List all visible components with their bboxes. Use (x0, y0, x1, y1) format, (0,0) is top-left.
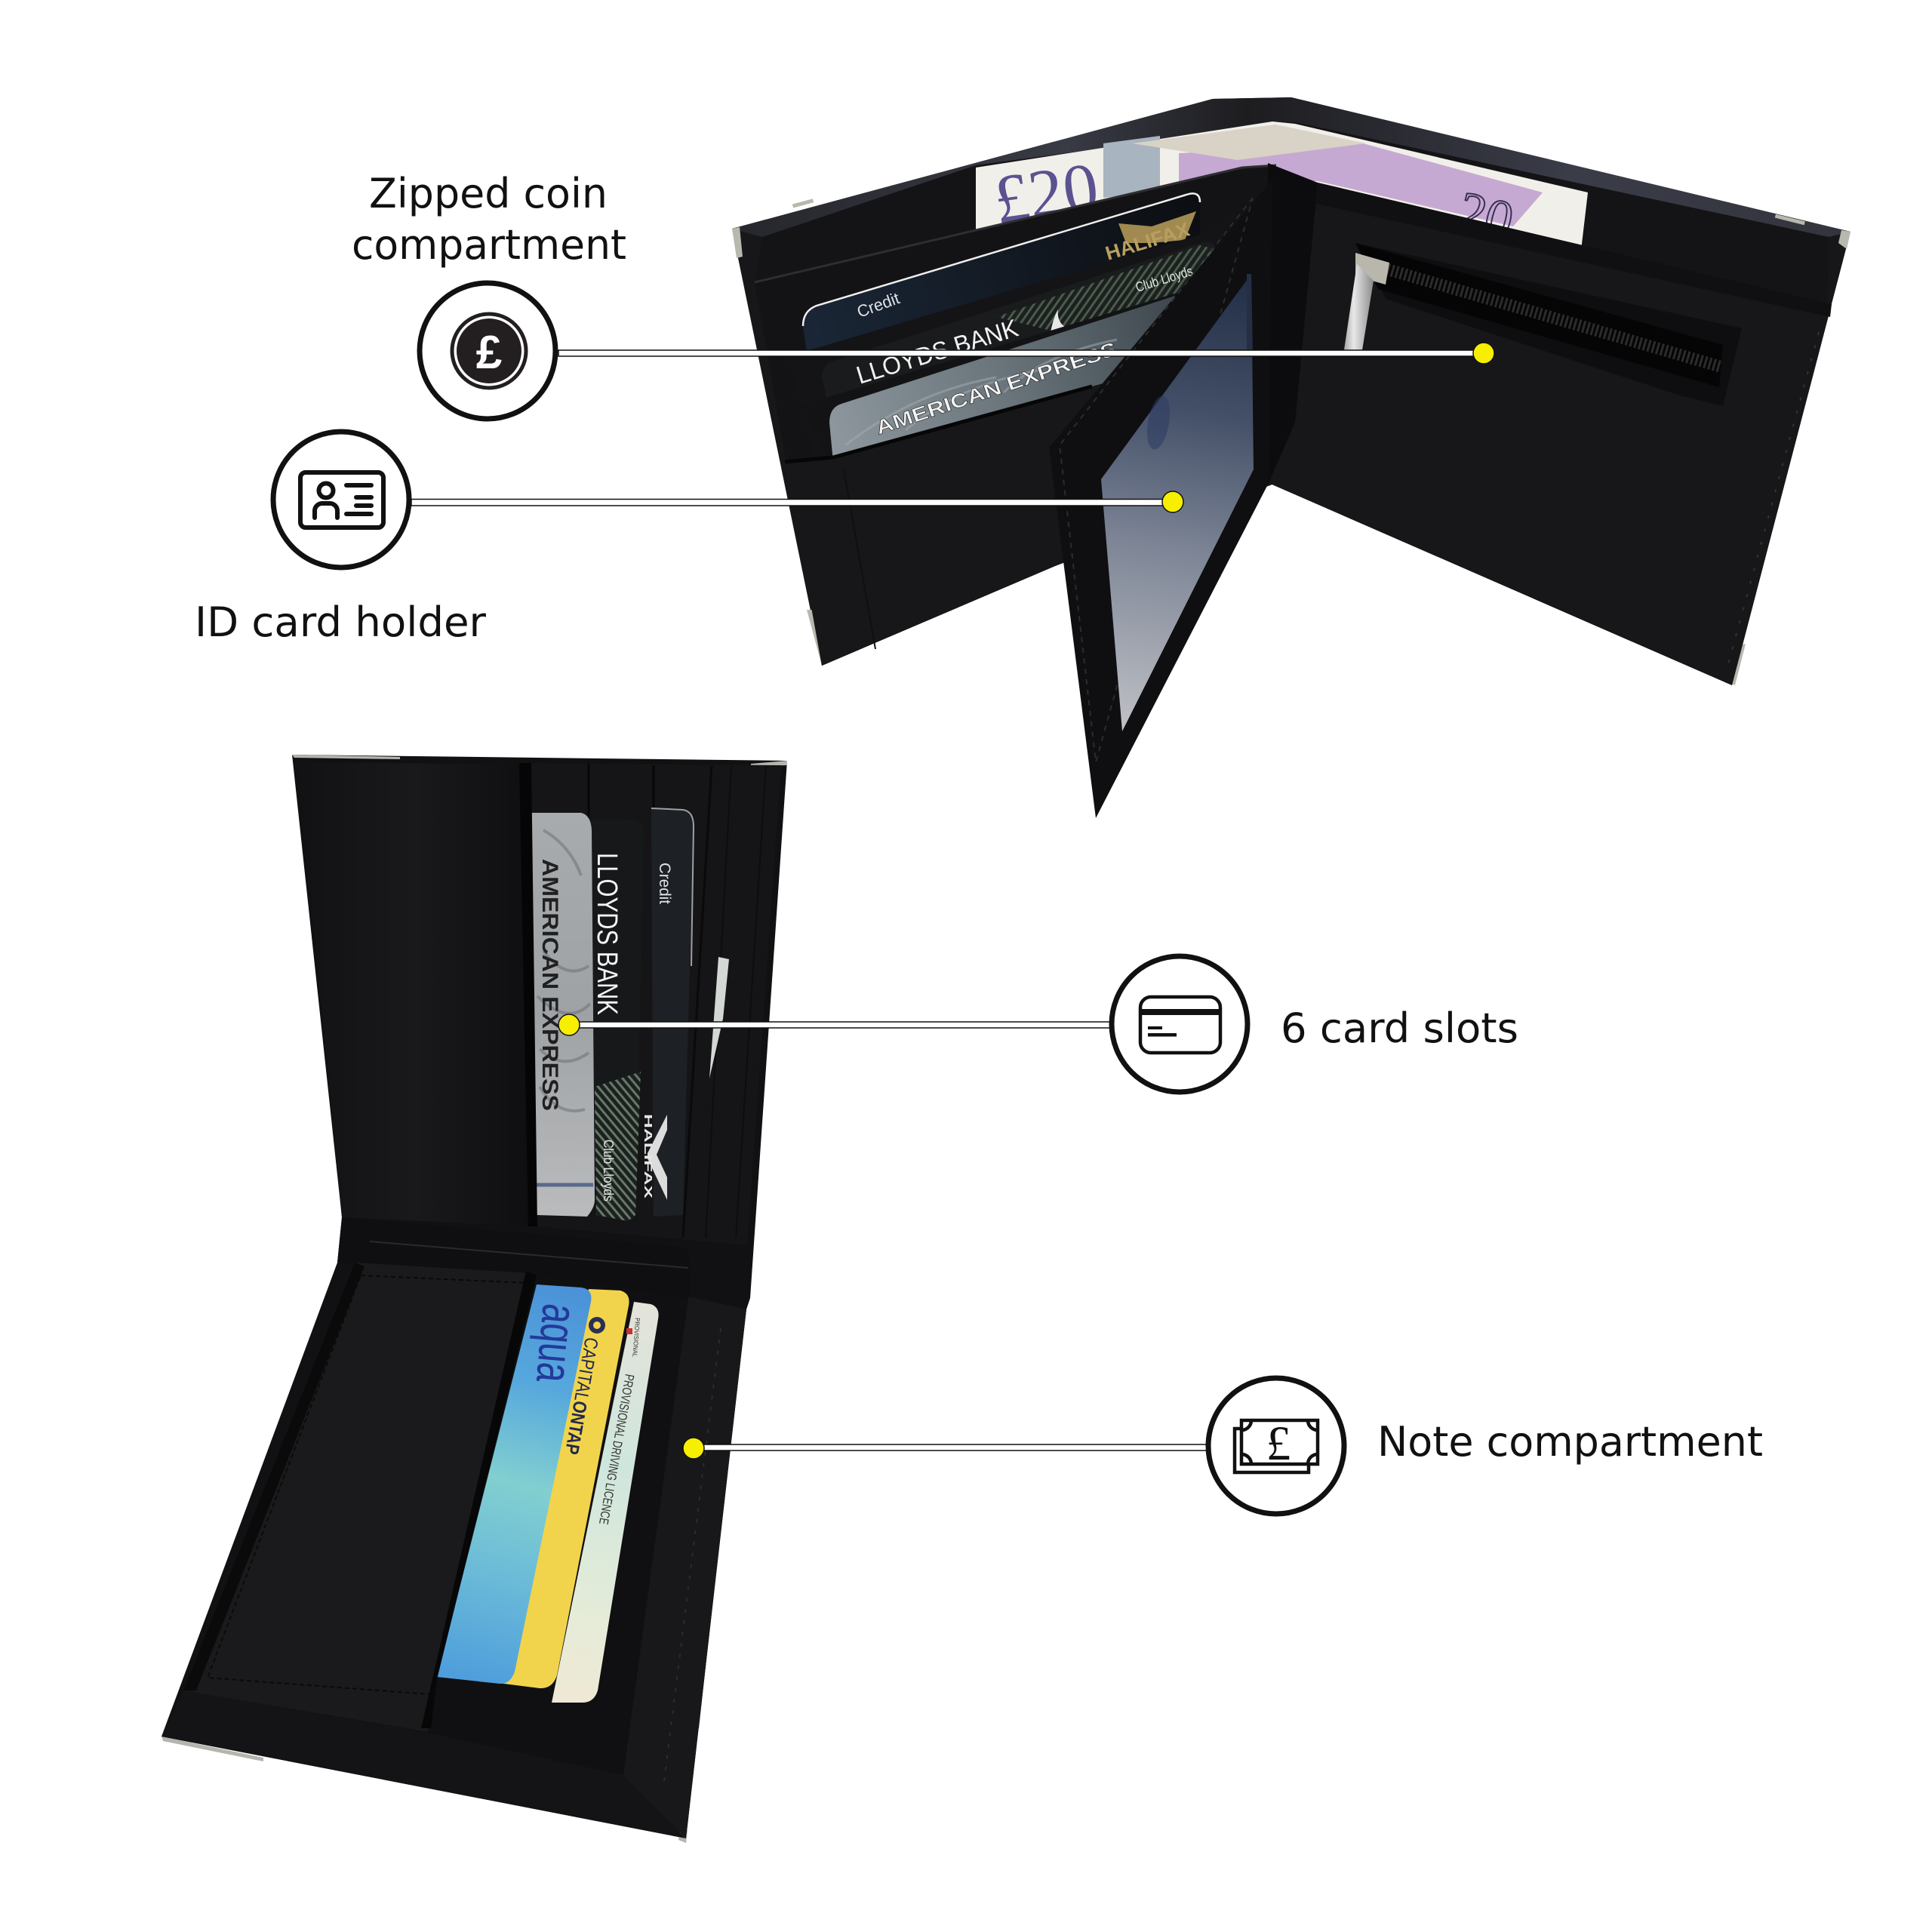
photo: open wallet with ID flap (732, 97, 1850, 818)
slot divider (789, 228, 1238, 528)
card: Aqua: aqua (526, 1302, 589, 1385)
light edge highlights (732, 198, 1850, 685)
label: ID card holder: ID card holder (195, 598, 487, 646)
card: Halifax credit card: Credit (854, 288, 902, 321)
lower left pocket (785, 347, 1276, 666)
callout: zipped coin compartment (352, 170, 1494, 419)
slate outer edge (697, 1419, 731, 1728)
card: driving licence: PROVISIONAL DRIVING LICENCE (596, 1373, 637, 1526)
icon circle (273, 432, 409, 568)
upper right slot panel (521, 763, 781, 1245)
slot divider (800, 279, 1238, 483)
right panel (1269, 183, 1832, 685)
card: Lloyds Bank (822, 242, 1217, 414)
icon: banknotes (1235, 1417, 1318, 1472)
lower band (162, 1690, 686, 1838)
card: Halifax credit: Credit (656, 863, 673, 904)
card: Capital One (498, 1289, 629, 1688)
banknote: 20 (1452, 180, 1519, 251)
card: Aqua (437, 1284, 591, 1684)
note compartment panel (623, 1297, 746, 1838)
icon: pound coin (452, 314, 526, 388)
callout: 6 card slots (558, 956, 1518, 1092)
label: zipped coin compartment: compartment (352, 221, 626, 269)
card: Lloyds Bank (589, 819, 644, 1221)
card: Lloyds Bank: LLOYDS BANK (853, 313, 1021, 389)
pocket edge strip (421, 1271, 537, 1728)
label: note compartment: Note compartment (1377, 1418, 1763, 1466)
card: American Express: AMERICAN EXPRESS (872, 337, 1120, 439)
label: zipped coin compartment (352, 170, 626, 269)
leader line (411, 500, 1173, 506)
banknote edge (709, 957, 729, 1078)
card: American Express: AMERICAN EXPRESS (537, 859, 562, 1111)
zip puller (1355, 253, 1389, 285)
card: Halifax credit card: HALIFAX (1103, 217, 1192, 265)
leader line (569, 1022, 1110, 1028)
interior back panel (755, 122, 1829, 306)
label: zipped coin compartment: Zipped coin (369, 170, 608, 217)
light edges (162, 755, 787, 1843)
icon: pound coin: £ (476, 327, 502, 379)
pocket stitch edge (519, 763, 537, 1226)
card: American Express (829, 296, 1177, 462)
card: Lloyds Bank: Club Lloyds (1134, 263, 1195, 295)
icon: banknotes: £ (1266, 1417, 1291, 1471)
card: Lloyds Bank: LLOYDS BANK (591, 853, 623, 1015)
spine (1268, 163, 1318, 483)
leader line (694, 1444, 1207, 1451)
callout: ID card holder (195, 432, 1183, 646)
card: Halifax credit (641, 808, 694, 1217)
icon: ID card (300, 472, 383, 528)
fold band (337, 1217, 691, 1302)
left card slot panel (755, 165, 1276, 666)
marker dot (683, 1438, 704, 1459)
photo: wallet with cards (162, 755, 787, 1843)
leader line (558, 350, 1484, 356)
card: Halifax credit: HALIFAX (641, 1114, 654, 1198)
ID window (1101, 274, 1254, 731)
card: driving licence (552, 1302, 659, 1703)
banknote: £20 (989, 148, 1103, 238)
icon circle (420, 283, 555, 419)
outer printed band (732, 97, 1850, 237)
marker dot (1162, 491, 1183, 512)
card: American Express (531, 813, 595, 1217)
upper left panel (298, 762, 537, 1226)
wallet outer shell (732, 97, 1850, 685)
card: Capital One: CAPITALONTAP (561, 1336, 602, 1456)
callout: note compartment (683, 1378, 1763, 1514)
zip pocket (1343, 243, 1742, 406)
ID flap (1049, 180, 1272, 818)
lower left panel (183, 1263, 532, 1733)
icon circle (1112, 956, 1247, 1092)
label: 6 card slots: 6 card slots (1281, 1004, 1518, 1052)
lower right pocket (428, 1273, 688, 1775)
icon circle (1208, 1378, 1344, 1514)
marker dot (558, 1014, 580, 1035)
wallet back (162, 755, 787, 1838)
card: driving licence: PROVISIONAL (631, 1318, 641, 1358)
banknote (976, 122, 1588, 257)
marker dot (1473, 343, 1494, 364)
card: Halifax credit card (803, 193, 1200, 353)
card: Lloyds Bank: Club Lloyds (601, 1140, 616, 1201)
icon: bank card (1140, 997, 1221, 1053)
